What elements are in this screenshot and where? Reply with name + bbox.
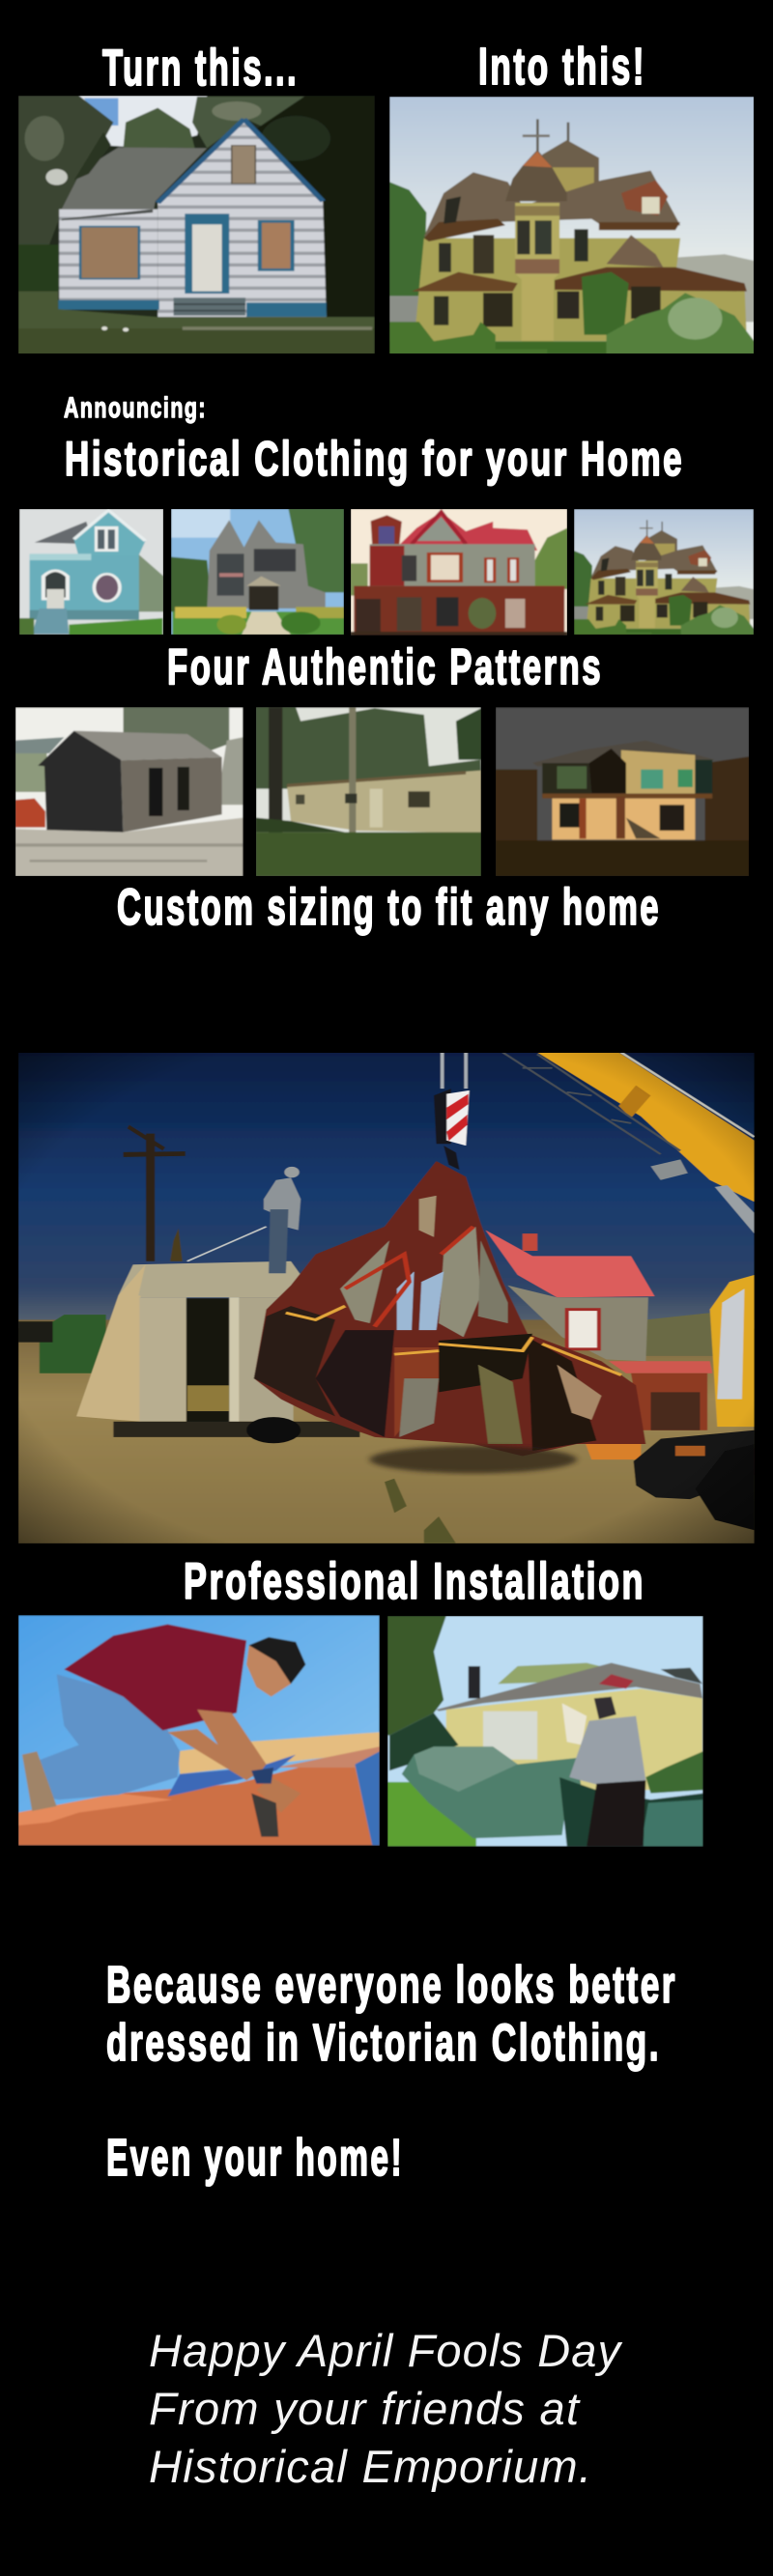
pattern photo: teal Victorian [19, 509, 163, 635]
heading: Announcing: Announcing: [64, 392, 207, 424]
home photo: collapsed two-storey house [496, 707, 750, 876]
sign-off message: From your friends at [149, 2383, 581, 2434]
draped Victorian dress fabric [254, 1161, 645, 1456]
sign-off message: Happy April Fools Day [149, 2325, 622, 2376]
text block: Because everyone looks better [106, 1956, 677, 2072]
pattern photo: olive mansion repeated [574, 509, 754, 635]
trailer [76, 1261, 359, 1443]
heading: Into this: Into this! [478, 38, 646, 96]
home photo: old trailer in the woods [256, 707, 481, 876]
sign-off message: Historical Emporium. [149, 2441, 591, 2492]
photo: installer lacing the fabric edge [18, 1615, 380, 1846]
red-roofed house end [486, 1231, 712, 1459]
photo: olive Victorian mansion [389, 97, 755, 354]
worker on the trailer roof [187, 1167, 301, 1273]
utility pole [124, 1125, 186, 1261]
home photo: weathered wooden shack [15, 707, 243, 876]
crane hook block [434, 1053, 470, 1170]
pattern photo: red roof Victorian [351, 509, 567, 635]
crane yellow body [710, 1275, 755, 1427]
heading: Turn this: Turn this... [102, 40, 299, 97]
photo: installers spreading a green tarp on a house [387, 1616, 703, 1847]
text: Even your home: Even your home! [106, 2129, 404, 2187]
photo: crane lowering a Victorian house dress over a trailer [18, 1053, 755, 1543]
crawler tracks [634, 1430, 755, 1530]
pattern photo: grey Gothic mansion [171, 509, 344, 635]
photo: run-down boarded house [18, 96, 375, 354]
sign-off message [149, 2325, 622, 2492]
crane boom [537, 1053, 755, 1202]
